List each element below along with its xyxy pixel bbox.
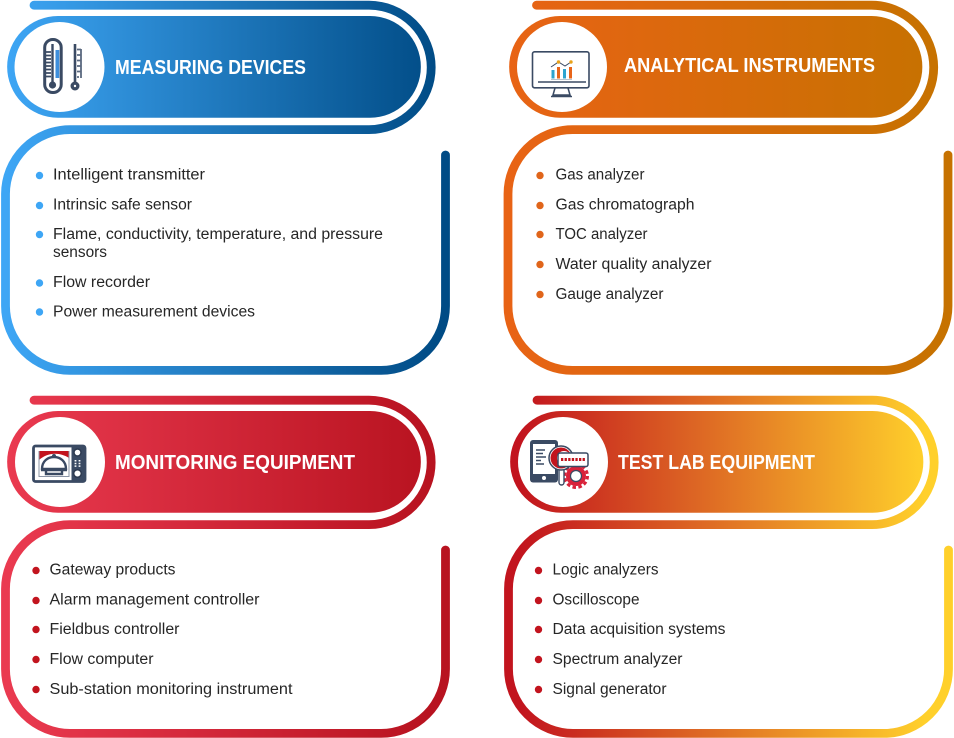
ribbon outline: [508, 5, 948, 370]
bullet list: Gas chromatograph: [556, 196, 694, 214]
bullet list: Oscilloscope: [552, 592, 640, 608]
heading: MONITORING EQUIPMENT: [115, 452, 355, 474]
icon: monitor chart: [517, 22, 607, 112]
bullet list: Flow computer: [50, 651, 154, 668]
bullet list: Signal generator: [552, 681, 666, 698]
bullet list: [32, 562, 293, 698]
bullet list: Data acquisition systems: [552, 621, 726, 638]
bullet list: [535, 562, 726, 698]
bullet list: Alarm management controller: [50, 592, 260, 608]
heading: TEST LAB EQUIPMENT: [618, 452, 815, 474]
bullet list: Gauge analyzer: [556, 286, 664, 303]
heading: ANALYTICAL INSTRUMENTS: [624, 55, 875, 77]
icon: monitoring panel: [15, 417, 105, 507]
panel: analytical instruments: [508, 5, 948, 370]
bullet list: [536, 166, 712, 303]
bullet list: Intelligent transmitter: [53, 166, 205, 184]
bullet list: Water quality analyzer: [556, 256, 712, 273]
header band: [510, 411, 923, 513]
panel: measuring devices: [6, 5, 446, 370]
bullet list: TOC analyzer: [556, 226, 648, 243]
bullet list: Gateway products: [50, 562, 176, 578]
bullet list: Sub-station monitoring instrument: [50, 681, 293, 698]
bullet list: Fieldbus controller: [50, 621, 180, 638]
bullet list: Logic analyzers: [552, 562, 659, 578]
header band: [7, 411, 421, 513]
bullet list: [36, 166, 383, 320]
bullet list: sensors: [53, 244, 107, 261]
bullet list: Flow recorder: [53, 274, 150, 291]
icon: thermometers: [14, 22, 104, 112]
header band: [509, 16, 922, 118]
panel: monitoring equipment: [6, 400, 446, 733]
bullet list: Power measurement devices: [53, 304, 255, 320]
ribbon outline: [6, 5, 446, 370]
ribbon outline: [6, 400, 446, 733]
icon: test lab tools: [518, 417, 608, 507]
ribbon outline: [508, 400, 948, 733]
bullet list: Gas analyzer: [556, 166, 644, 184]
bullet list: Intrinsic safe sensor: [53, 196, 192, 214]
panel: test lab equipment: [508, 400, 948, 733]
bullet list: Spectrum analyzer: [552, 651, 682, 668]
header band: [7, 16, 421, 118]
bullet list: Flame, conductivity, temperature, and pressure: [53, 226, 383, 243]
heading: MEASURING DEVICES: [115, 57, 306, 79]
